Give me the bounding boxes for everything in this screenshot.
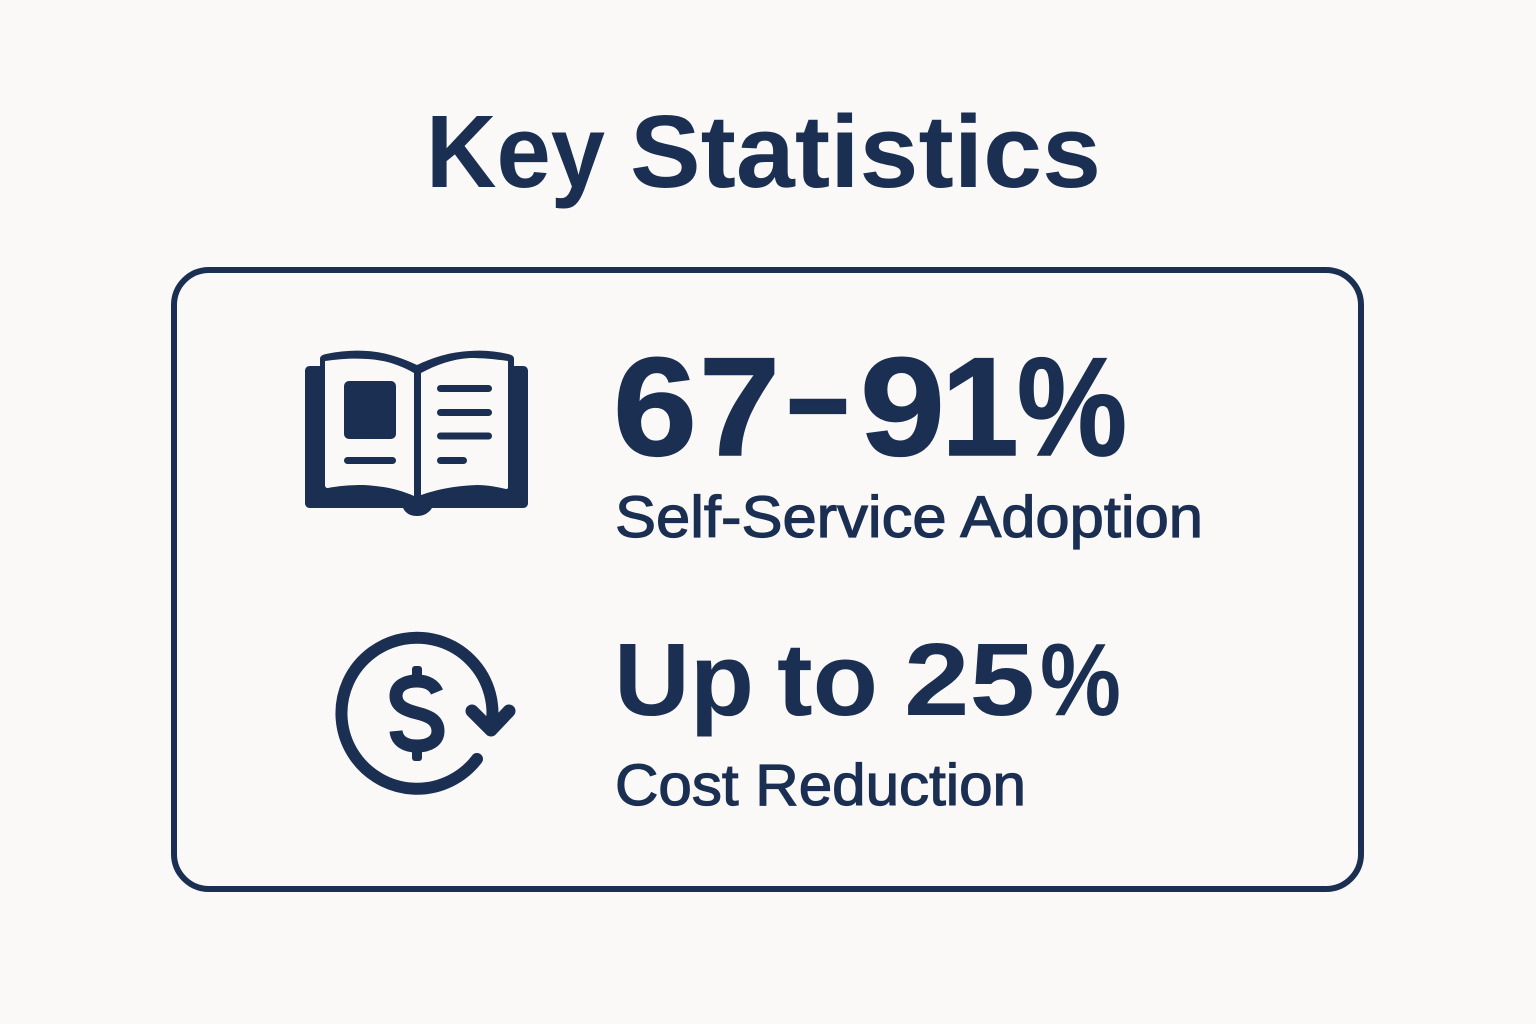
label: Cost Reduction: Cost Reduction <box>615 753 1026 818</box>
stat: Up to 25%: Up <box>614 622 754 737</box>
stat: 67–91%: 7 <box>699 328 780 485</box>
label: Self-Service Adoption: Self-Service Adoption <box>615 485 1203 550</box>
title <box>426 94 1101 209</box>
stat: Up to 25% <box>614 622 1121 737</box>
panel: statistics card <box>174 270 1361 889</box>
stat: Up to 25%: 25 <box>904 622 1035 737</box>
stat: 67–91%: 9 <box>860 328 945 485</box>
stat: 67–91%: – <box>787 317 849 474</box>
title: Statistics <box>630 94 1101 209</box>
stat: Up to 25%: to <box>777 622 878 737</box>
stat: 67–91% <box>613 317 1127 485</box>
icon: dollar with circular arrow <box>341 638 509 789</box>
stat: 67–91%: % <box>1017 328 1127 485</box>
icon: open book <box>305 351 528 516</box>
stat: 67–91%: 1 <box>941 328 1019 485</box>
stat: Up to 25%: % <box>1040 622 1121 737</box>
title: Key <box>426 94 605 209</box>
stat: 67–91%: 6 <box>613 328 697 485</box>
